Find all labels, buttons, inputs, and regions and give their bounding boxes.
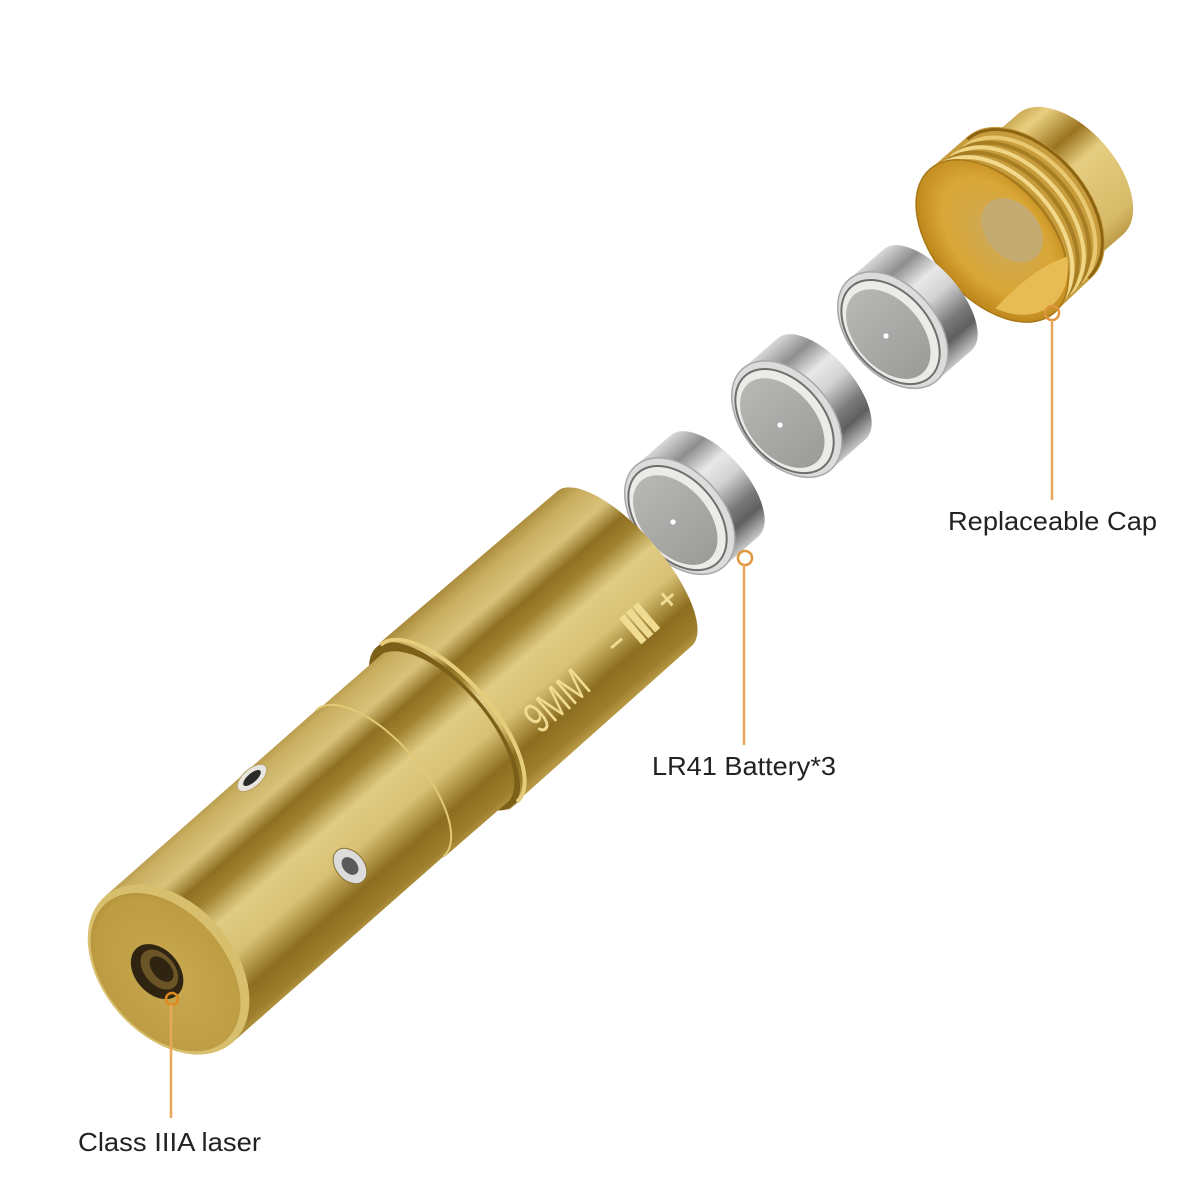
engraved scale (600, 581, 684, 661)
battery rim (710, 340, 864, 499)
battery 2 (710, 317, 890, 499)
cap inner shine (994, 249, 1084, 335)
battery dot (776, 421, 784, 429)
battery 1 (603, 414, 783, 596)
flange highlight (967, 101, 1132, 278)
callout: battery (652, 551, 836, 781)
callout: laser (78, 993, 261, 1157)
battery groove (609, 447, 746, 589)
battery disc (829, 273, 947, 395)
callout: replaceable cap: Replaceable Cap (948, 506, 1157, 536)
battery dot (882, 332, 890, 340)
front face (61, 864, 271, 1080)
battery groove (822, 261, 959, 403)
laser aperture (120, 934, 194, 1009)
battery 3 (816, 228, 996, 410)
battery groove (716, 350, 853, 492)
middle barrel (317, 628, 539, 857)
front face rim (55, 853, 282, 1086)
laser body (48, 465, 723, 1091)
side screw (326, 842, 374, 890)
callout: laser: Class IIIA laser (78, 1127, 261, 1157)
cap opening (886, 131, 1098, 351)
shoulder ring (381, 616, 550, 802)
seam (316, 682, 475, 856)
battery rim (816, 251, 970, 410)
cap inner floor (969, 186, 1055, 274)
battery disc (723, 362, 841, 484)
battery rim (603, 437, 757, 596)
battery dot (669, 518, 677, 526)
battery disc (616, 459, 734, 581)
cap rear band (984, 84, 1157, 264)
battery side (743, 317, 890, 470)
battery side (849, 228, 996, 381)
callout: replaceable cap (948, 306, 1157, 536)
cap threads (933, 108, 1126, 310)
front barrel (104, 682, 477, 1043)
cap (886, 72, 1166, 351)
battery side (636, 414, 783, 567)
shoulder shade (343, 617, 549, 835)
callout: battery: LR41 Battery*3 (652, 751, 836, 781)
engraved 9MM: 9MM (514, 660, 599, 743)
top screw (233, 759, 271, 797)
rear barrel (369, 465, 723, 812)
cap flange (930, 98, 1136, 313)
